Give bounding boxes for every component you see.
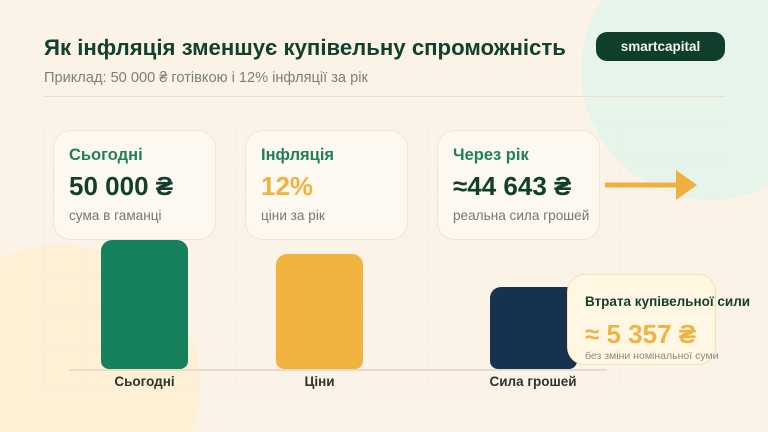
brand badge: smartcapital — [621, 39, 700, 54]
brand badge — [596, 32, 725, 61]
card note: after a year: реальна сила грошей — [453, 208, 589, 223]
callout value: ≈ 5 357 ₴ — [585, 319, 696, 349]
callout heading: Втрата купівельної сили — [585, 294, 750, 309]
card note: inflation: ціни за рік — [261, 208, 325, 223]
card heading: after a year: Через рік — [453, 146, 529, 164]
label: purchasing power: Сила грошей — [489, 374, 577, 389]
bar: today — [101, 240, 188, 369]
bar: prices — [276, 254, 363, 369]
title: Як інфляція зменшує купівельну спроможність — [44, 35, 566, 60]
card value: today: 50 000 ₴ — [69, 171, 173, 201]
arrow — [605, 170, 697, 200]
panel: after a year card — [437, 130, 600, 240]
label: prices: Ціни — [304, 374, 335, 389]
card heading: inflation: Інфляція — [261, 146, 334, 164]
subtitle: Приклад: 50 000 ₴ готівкою і 12% інфляції за рік — [44, 70, 368, 86]
bar chart — [69, 240, 607, 371]
card heading: today: Сьогодні — [69, 146, 143, 164]
callout note: без зміни номінальної суми — [585, 350, 719, 362]
card value: after a year: ≈44 643 ₴ — [453, 171, 571, 201]
bar: purchasing power — [490, 287, 577, 369]
callout: lost purchasing power — [567, 274, 716, 365]
header divider — [44, 96, 725, 97]
panel: inflation card — [245, 130, 408, 240]
panel: today card — [53, 130, 216, 240]
label: today: Сьогодні — [114, 374, 175, 389]
card value: inflation: 12% — [261, 171, 313, 201]
axis line — [69, 369, 607, 371]
card note: today: сума в гаманці — [69, 208, 162, 223]
